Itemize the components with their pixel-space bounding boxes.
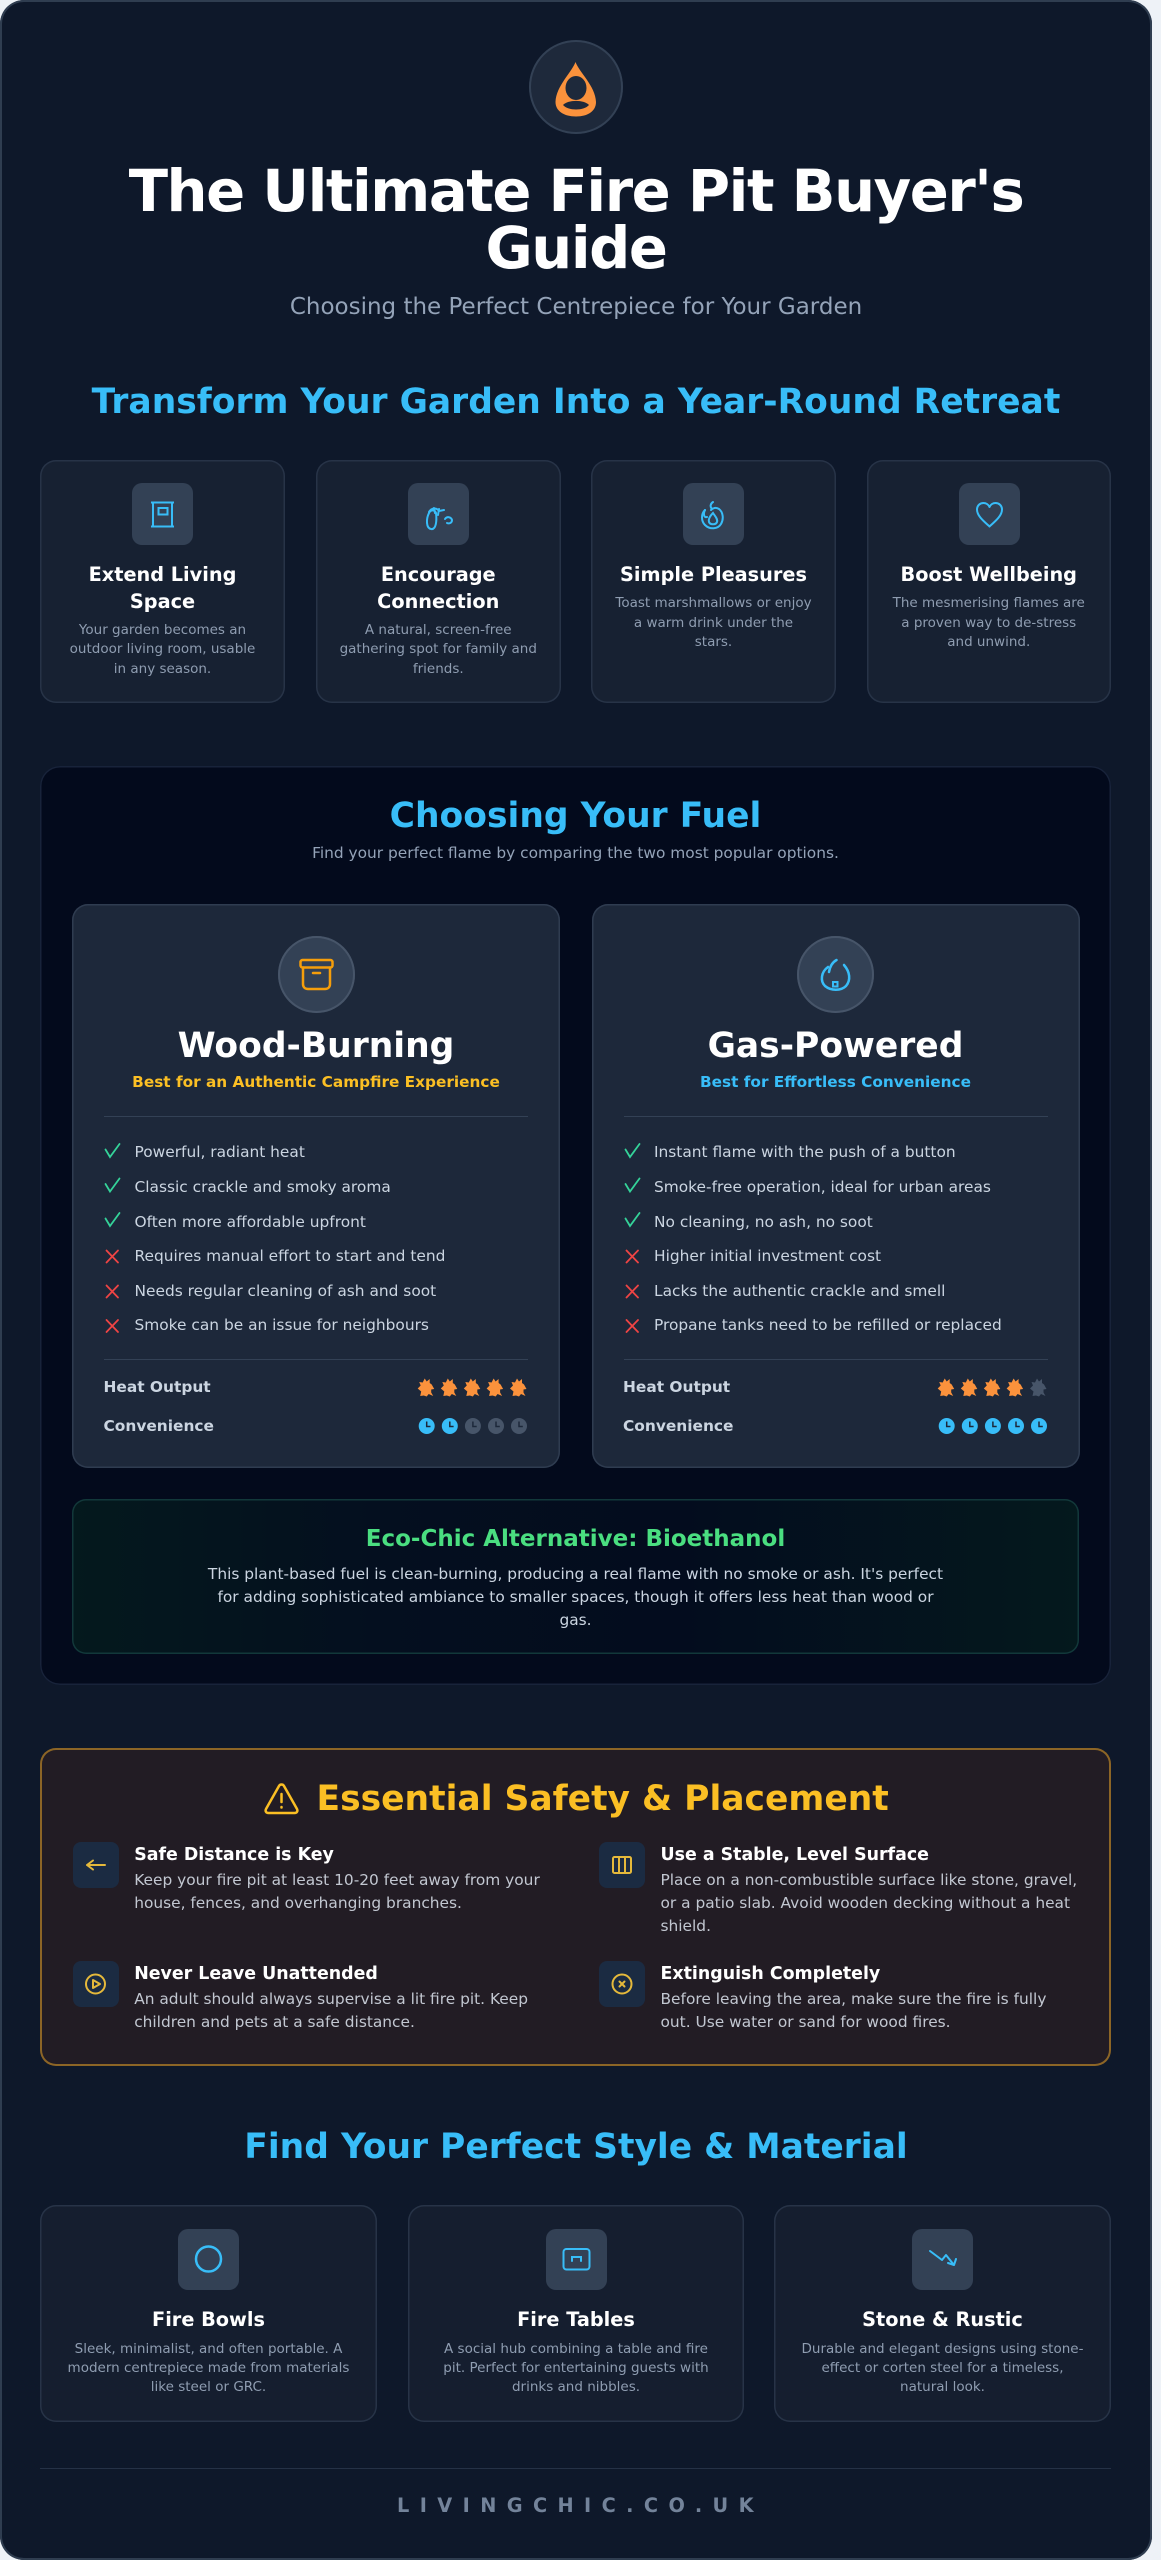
rating: heat five of five <box>418 1378 526 1396</box>
safety item text: out. Use water or sand for wood fires. <box>660 2013 951 2031</box>
safety item text: shield. <box>660 1917 711 1935</box>
card title: Connection <box>377 590 499 612</box>
safety item title: Safe Distance is Key <box>134 1845 334 1865</box>
eco text: for adding sophisticated ambiance to smaller spaces, though it offers less heat than wood or <box>217 1588 934 1606</box>
card text <box>70 622 255 677</box>
card title: Boost Wellbeing <box>900 562 1077 586</box>
card text: a warm drink under the <box>634 615 793 631</box>
panel: wood-burning: Smoke can be an issue for neighbours <box>134 1316 429 1334</box>
icon: circle <box>178 2229 239 2290</box>
rating label: convenience: Convenience <box>104 1417 214 1435</box>
icon: columns <box>598 1842 644 1888</box>
rating: convenience five of five <box>938 1418 1047 1434</box>
list text: Powerful, radiant heat <box>134 1143 305 1161</box>
icon: warning triangle <box>264 1783 299 1814</box>
card title <box>377 562 499 612</box>
card text: modern centrepiece made from materials <box>68 2360 349 2376</box>
panel: extend living space <box>40 460 285 703</box>
card text: A social hub combining a table and fire <box>444 2340 708 2356</box>
card text: A natural, screen-free <box>365 622 512 638</box>
panel: gas-powered <box>592 904 1080 1468</box>
title <box>129 158 1023 282</box>
card text: friends. <box>413 661 464 677</box>
panel: gas-powered: Lacks the authentic crackle and smell <box>654 1282 945 1300</box>
rating: heat four of five <box>938 1378 1046 1396</box>
subtitle: Choosing the Perfect Centrepiece for Your Garden <box>290 294 862 320</box>
safety item text: Place on a non-combustible surface like stone, gravel, <box>660 1870 1077 1888</box>
panel: fire bowls <box>40 2205 377 2422</box>
card text: outdoor living room, usable <box>70 641 255 657</box>
safety item text: Before leaving the area, make sure the fire is fully <box>660 1990 1046 2008</box>
safety item text: Keep your fire pit at least 10-20 feet away from your <box>134 1870 540 1888</box>
card text: drinks and nibbles. <box>512 2379 640 2395</box>
panel: eco-chic alternative <box>72 1499 1079 1654</box>
title: Guide <box>485 215 667 282</box>
header icon: flame <box>529 40 623 134</box>
card text: pit. Perfect for entertaining guests with <box>443 2360 709 2376</box>
rating label: convenience: Convenience <box>623 1417 734 1435</box>
card title: Stone & Rustic <box>862 2308 1023 2330</box>
eco title: Eco-Chic Alternative: Bioethanol <box>366 1526 785 1552</box>
eco text: This plant-based fuel is clean-burning, producing a real flame with no smoke or ash. It's perfect <box>208 1565 943 1583</box>
card text: gathering spot for family and <box>340 641 537 657</box>
panel: gas-powered: Higher initial investment cost <box>654 1247 881 1265</box>
icon: arrow <box>73 1842 119 1888</box>
pros and cons list <box>624 1143 640 1333</box>
icon: x circle <box>598 1961 644 2007</box>
card text <box>892 595 1085 650</box>
panel: encourage connection <box>316 460 560 703</box>
card title: Encourage <box>381 562 496 586</box>
list text: Instant flame with the push of a button <box>654 1143 956 1161</box>
card text: Durable and elegant designs using stone- <box>802 2340 1083 2356</box>
fuel title: Wood-Burning <box>178 1026 454 1066</box>
rating label: heat: Heat Output <box>623 1378 730 1396</box>
heading: styles: Find Your Perfect Style & Material <box>244 2127 908 2167</box>
card text: Toast marshmallows or enjoy <box>615 595 812 611</box>
title: The Ultimate Fire Pit Buyer's <box>129 158 1023 225</box>
card text: like steel or GRC. <box>151 2379 266 2395</box>
safety item text: An adult should always supervise a lit fire pit. Keep <box>134 1990 528 2008</box>
panel: choosing your fuel <box>40 766 1111 1685</box>
panel: gas-powered: Propane tanks need to be refilled or replaced <box>654 1316 1002 1334</box>
safety item text <box>660 1990 1046 2031</box>
card text: The mesmerising flames are <box>893 595 1085 611</box>
icon: wood box <box>278 936 354 1013</box>
card title: Fire Tables <box>517 2308 635 2330</box>
fuel tagline: Best for Effortless Convenience <box>700 1072 971 1090</box>
panel: wood-burning: Needs regular cleaning of ash and soot <box>134 1282 436 1300</box>
card text: natural look. <box>900 2379 985 2395</box>
card text <box>340 622 537 677</box>
heading: benefits: Transform Your Garden Into a Year-Round Retreat <box>92 382 1060 422</box>
card text <box>802 2340 1083 2395</box>
card text: a proven way to de-stress <box>901 615 1076 631</box>
card title: Extend Living <box>89 562 236 586</box>
card text <box>615 595 812 650</box>
panel: gas-powered: No cleaning, no ash, no soot <box>654 1212 873 1230</box>
fuel title: Gas-Powered <box>708 1026 963 1066</box>
safety item title: Extinguish Completely <box>660 1964 880 1984</box>
safety item text <box>660 1870 1077 1935</box>
icon: gas flame <box>797 936 874 1013</box>
panel: boost wellbeing <box>866 460 1111 703</box>
card text: stars. <box>695 634 732 650</box>
card title: Space <box>130 590 195 612</box>
panel: wood-burning: Requires manual effort to start and tend <box>134 1247 445 1265</box>
panel: wood-burning: Classic crackle and smoky aroma <box>134 1178 391 1196</box>
card text <box>443 2340 709 2395</box>
panel: stone and rustic <box>774 2205 1111 2422</box>
rating: convenience two of five <box>418 1418 527 1434</box>
check icons <box>104 1143 120 1333</box>
footer: LIVINGCHIC.CO.UK <box>397 2494 764 2517</box>
card text: Sleek, minimalist, and often portable. A <box>75 2340 342 2356</box>
panel: wood-burning: Often more affordable upfront <box>134 1212 366 1230</box>
panel: fire tables <box>408 2205 744 2422</box>
panel: gas-powered: Smoke-free operation, ideal for urban areas <box>654 1178 991 1196</box>
rating label: heat: Heat Output <box>104 1378 211 1396</box>
card text: in any season. <box>114 661 211 677</box>
card text <box>68 2340 349 2395</box>
safety item text: or a patio slab. Avoid wooden decking without a heat <box>660 1894 1070 1912</box>
safety item text: children and pets at a safe distance. <box>134 2013 415 2031</box>
safety item text <box>134 1990 528 2031</box>
card text: and unwind. <box>947 634 1030 650</box>
panel: simple pleasures <box>591 460 836 703</box>
check icons <box>624 1143 640 1333</box>
heading: safety: Essential Safety & Placement <box>316 1778 889 1818</box>
icon: flame ring <box>683 483 744 545</box>
eco text: gas. <box>559 1611 592 1629</box>
safety item title: Never Leave Unattended <box>134 1964 378 1984</box>
card text: effect or corten steel for a timeless, <box>821 2360 1064 2376</box>
pros and cons list <box>104 1143 120 1333</box>
icon: table <box>546 2229 606 2290</box>
icon: hand <box>408 483 469 545</box>
panel: essential safety and placement <box>40 1748 1111 2066</box>
card title <box>89 562 236 612</box>
fuel tagline: Best for an Authentic Campfire Experience <box>132 1072 500 1090</box>
safety item title: Use a Stable, Level Surface <box>660 1845 929 1865</box>
safety item text: house, fences, and overhanging branches. <box>134 1894 462 1912</box>
panel: wood-burning <box>72 904 560 1468</box>
card title: Fire Bowls <box>152 2308 265 2330</box>
icon: door <box>132 483 193 545</box>
safety item text <box>134 1870 540 1912</box>
icon: heart <box>958 483 1020 545</box>
fuel intro text: Find your perfect flame by comparing the two most popular options. <box>312 844 839 862</box>
card text: Your garden becomes an <box>79 622 246 638</box>
eco text <box>208 1565 943 1629</box>
heading: fuel: Choosing Your Fuel <box>390 796 761 836</box>
icon: play circle <box>73 1961 119 2007</box>
card title: Simple Pleasures <box>620 562 807 586</box>
icon: zigzag <box>912 2229 973 2290</box>
